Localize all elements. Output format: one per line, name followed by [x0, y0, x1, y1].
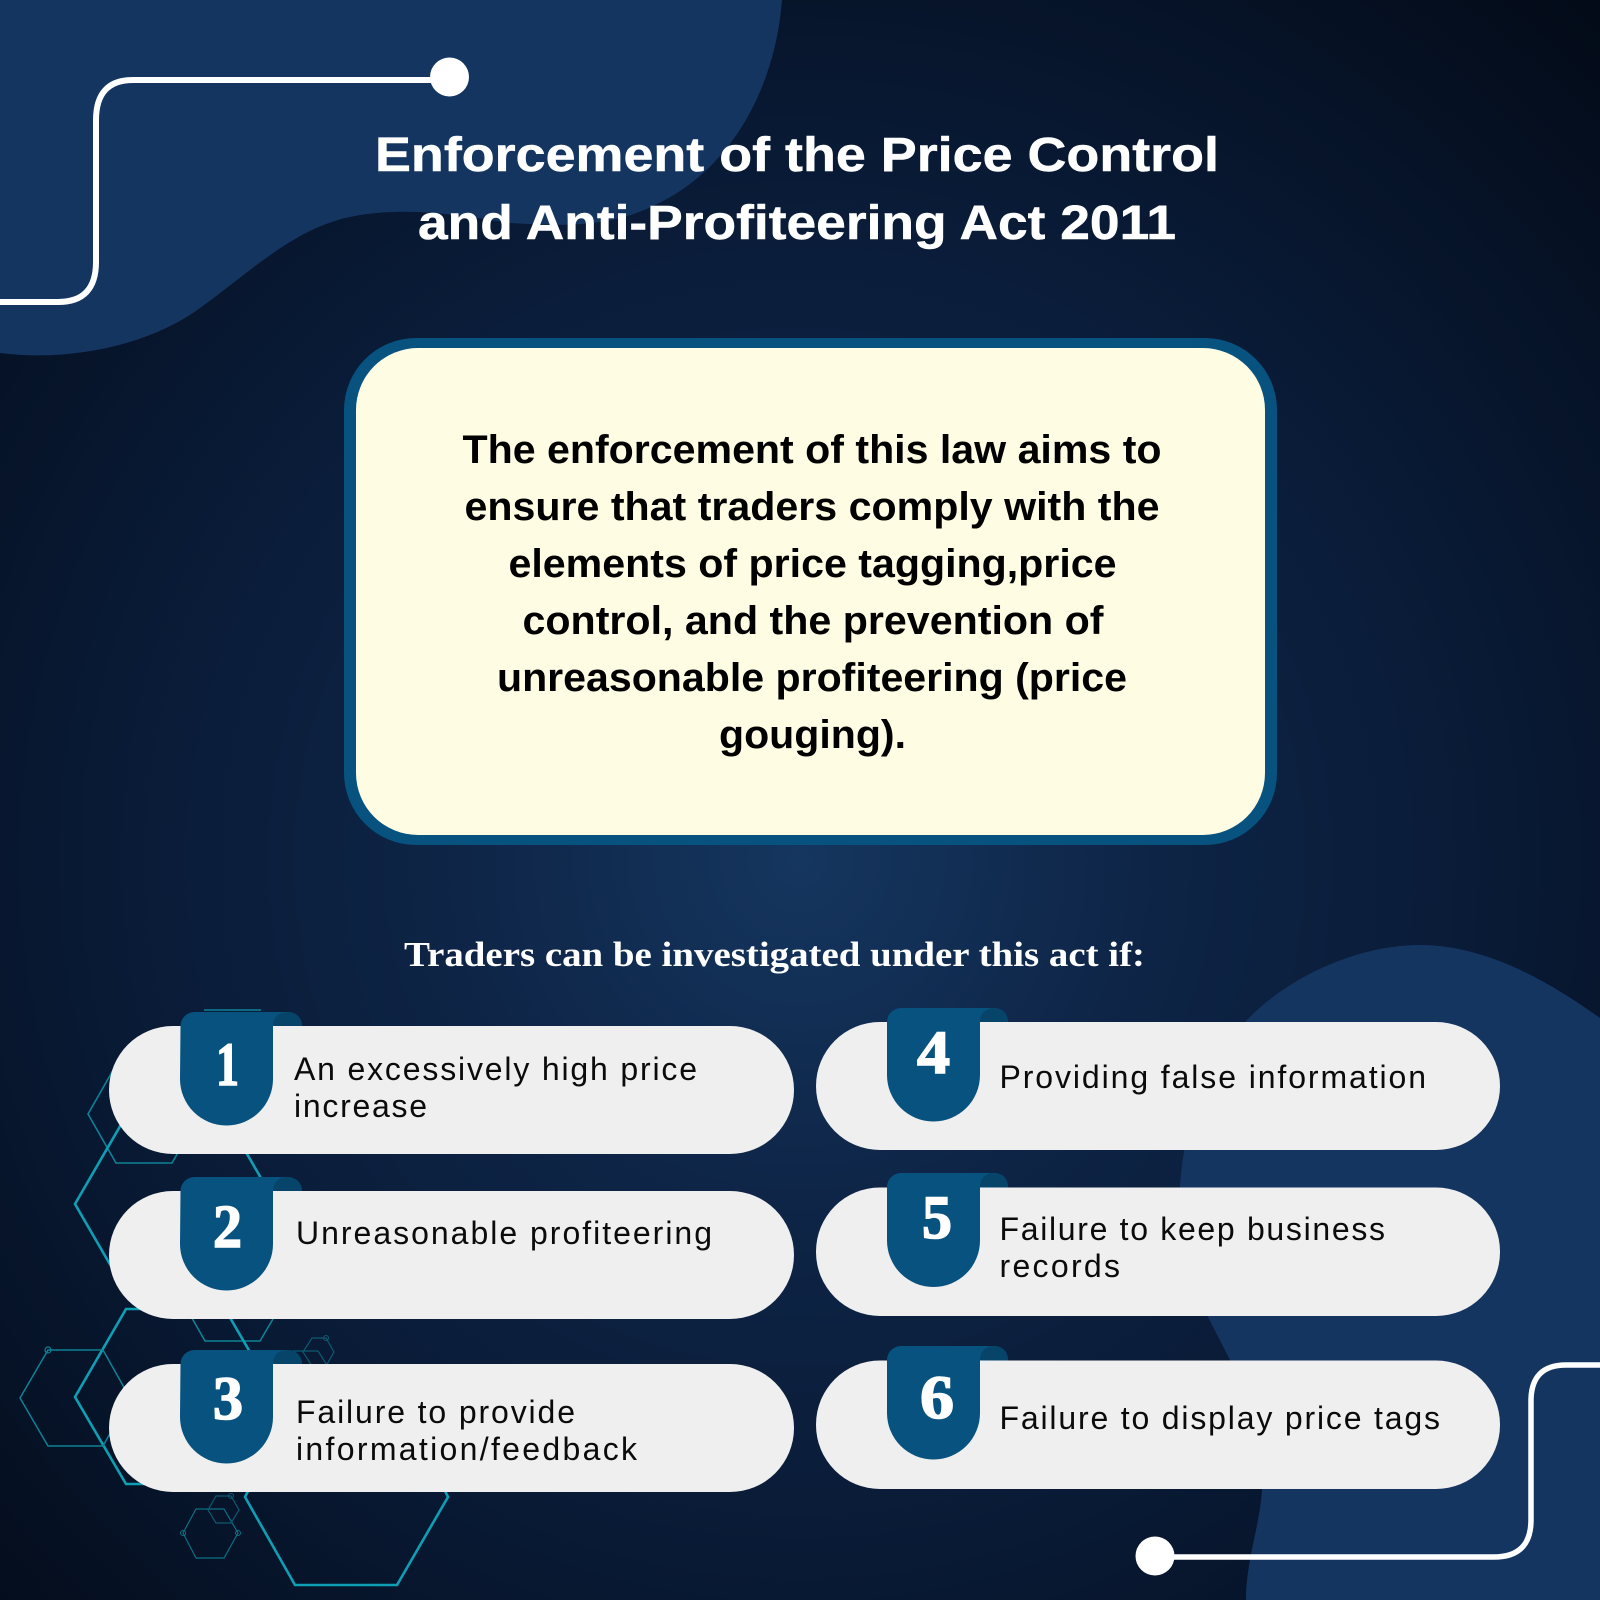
tag 4 — [887, 1008, 1010, 1122]
item 5 — [816, 1173, 1500, 1316]
callout text: gouging). — [719, 713, 906, 757]
connector line: bottom right — [1136, 1365, 1600, 1576]
tag 1 — [180, 1012, 303, 1126]
item 1: An excessively high price — [294, 1051, 697, 1087]
tag 2 — [180, 1177, 303, 1290]
title — [375, 129, 1219, 250]
item 5: records — [1000, 1248, 1120, 1284]
title: and Anti-Profiteering Act 2011 — [418, 197, 1176, 250]
item 3: Failure to provide — [296, 1394, 575, 1430]
tag 1: 1 — [216, 1032, 239, 1099]
tag 5: 5 — [922, 1185, 952, 1252]
tag 6 — [887, 1346, 1010, 1460]
tag 4: 4 — [917, 1020, 950, 1087]
item 5: Failure to keep business — [1000, 1211, 1385, 1247]
callout text: control, and the prevention of — [522, 599, 1104, 643]
blob: bottom right — [1180, 945, 1600, 1600]
decorative hexagon cluster — [20, 1010, 448, 1585]
item 3 — [109, 1350, 794, 1492]
item 6: Failure to display price tags — [1000, 1400, 1440, 1436]
tag 5 — [887, 1173, 1010, 1287]
item 4 — [816, 1008, 1500, 1150]
item 2 — [109, 1177, 794, 1319]
subheading: Traders can be investigated under this act if: — [404, 935, 1145, 974]
item 3: information/feedback — [296, 1431, 638, 1467]
tag 6: 6 — [920, 1365, 954, 1432]
tag 3 — [180, 1350, 303, 1464]
tag 3: 3 — [213, 1366, 243, 1433]
tag 2: 2 — [213, 1194, 242, 1261]
callout text: ensure that traders comply with the — [464, 485, 1160, 529]
callout text: elements of price tagging,price — [508, 542, 1116, 586]
item 2: Unreasonable profiteering — [296, 1215, 712, 1251]
callout text: The enforcement of this law aims to — [462, 428, 1162, 472]
callout text: unreasonable profiteering (price — [497, 656, 1127, 700]
item 1: increase — [294, 1088, 427, 1124]
item 4: Providing false information — [1000, 1059, 1426, 1095]
panel: law aim callout — [344, 338, 1277, 845]
item 6 — [816, 1346, 1500, 1489]
title: Enforcement of the Price Control — [375, 129, 1219, 182]
connector line: top left — [0, 58, 469, 302]
blob: top left — [0, 0, 782, 355]
callout text — [462, 428, 1162, 757]
item 1 — [109, 1012, 794, 1154]
